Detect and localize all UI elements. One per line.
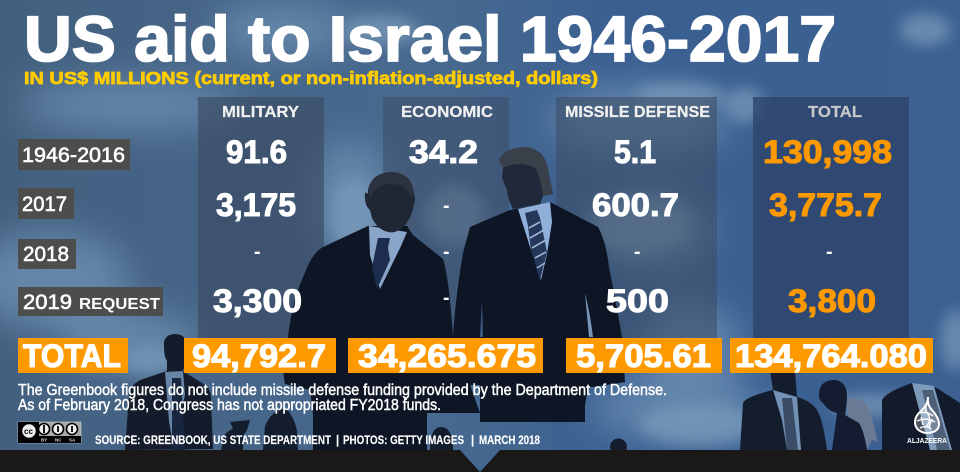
column headers: MILITARY [222, 104, 299, 121]
column headers: MISSILE DEFENSE [565, 104, 710, 121]
data: military column values: - [254, 242, 260, 263]
data: total column values: 3,775.7 [769, 187, 882, 223]
row labels: REQUEST [79, 296, 160, 313]
total row [18, 338, 933, 374]
column headers [222, 104, 862, 121]
bottom band [0, 450, 960, 472]
panel: missile defense column [556, 97, 717, 338]
icon: creative commons badge: SA [69, 438, 76, 442]
photo: woman's hair [847, 398, 878, 450]
column headers: ECONOMIC [401, 104, 493, 121]
data: missile defense column values: - [634, 242, 640, 263]
footnotes: As of February 2018, Congress has not appropriated FY2018 funds. [18, 397, 441, 414]
data: military column values: 3,300 [213, 283, 302, 319]
photo: Netanyahu silhouette [283, 172, 480, 450]
data: economic column values: - [443, 242, 450, 263]
data: military column values: 3,175 [216, 187, 296, 223]
total row: TOTAL [23, 338, 121, 374]
panel: total column [753, 97, 909, 338]
icon: creative commons badge: NC [55, 438, 62, 442]
icon: Al Jazeera logo: ALJAZEERA [907, 436, 948, 445]
row labels: 1946-2016 [22, 144, 125, 167]
row labels [18, 139, 163, 316]
title: US aid to Israel 1946-2017 [24, 3, 836, 75]
panel: economic column [383, 97, 509, 338]
source line: SOURCE: GREENBOOK, US STATE DEPARTMENT [95, 435, 331, 447]
icon: creative commons badge: BY [41, 438, 47, 442]
icon: creative commons badge [18, 422, 81, 443]
photo: Trump silhouette [440, 147, 625, 422]
data: economic column values: 34.2 [409, 134, 478, 170]
data: total column values: 130,998 [763, 134, 892, 170]
footnotes: The Greenbook figures do not include missile defense funding provided by the Department of Defense. [18, 382, 667, 399]
data: economic column values [409, 134, 478, 309]
photo: small background figures [221, 409, 627, 456]
photo: guard at left [125, 334, 213, 450]
data: missile defense column values: 5.1 [614, 134, 656, 170]
data: missile defense column values: 500 [606, 283, 669, 319]
photo: guard at far right [882, 383, 960, 450]
panel: military column [198, 97, 324, 338]
data: economic column values: - [443, 288, 450, 309]
row labels: 2017 [22, 193, 67, 216]
icon: creative commons badge: cc [24, 427, 33, 436]
data: total column values: - [826, 242, 832, 263]
total row: 94,792.7 [192, 338, 326, 374]
source line [95, 435, 541, 447]
data: missile defense column values [592, 134, 679, 319]
data: total column values [763, 134, 892, 319]
source line: | [471, 435, 474, 447]
data: military column values [213, 134, 302, 319]
data: economic column values: - [443, 196, 450, 217]
total row: 34,265.675 [358, 338, 536, 374]
icon: Al Jazeera logo [907, 397, 948, 445]
source line: | [336, 435, 339, 447]
column headers: TOTAL [808, 104, 862, 121]
source line: MARCH 2018 [479, 435, 541, 447]
total row: 5,705.61 [576, 338, 711, 374]
footnotes [18, 382, 667, 414]
total row: 134,764.080 [735, 338, 927, 374]
subtitle: IN US$ MILLIONS (current, or non-inflation-adjusted, dollars) [24, 68, 598, 88]
source line: PHOTOS: GETTY IMAGES [343, 435, 464, 447]
row labels: 2019 [23, 291, 72, 314]
data: missile defense column values: 600.7 [592, 187, 679, 223]
data: total column values: 3,800 [788, 283, 876, 319]
row labels: 2018 [23, 243, 69, 266]
photo: guard in profile [819, 380, 867, 450]
data: military column values: 91.6 [226, 134, 287, 170]
photo: right-hand guard [740, 370, 827, 450]
